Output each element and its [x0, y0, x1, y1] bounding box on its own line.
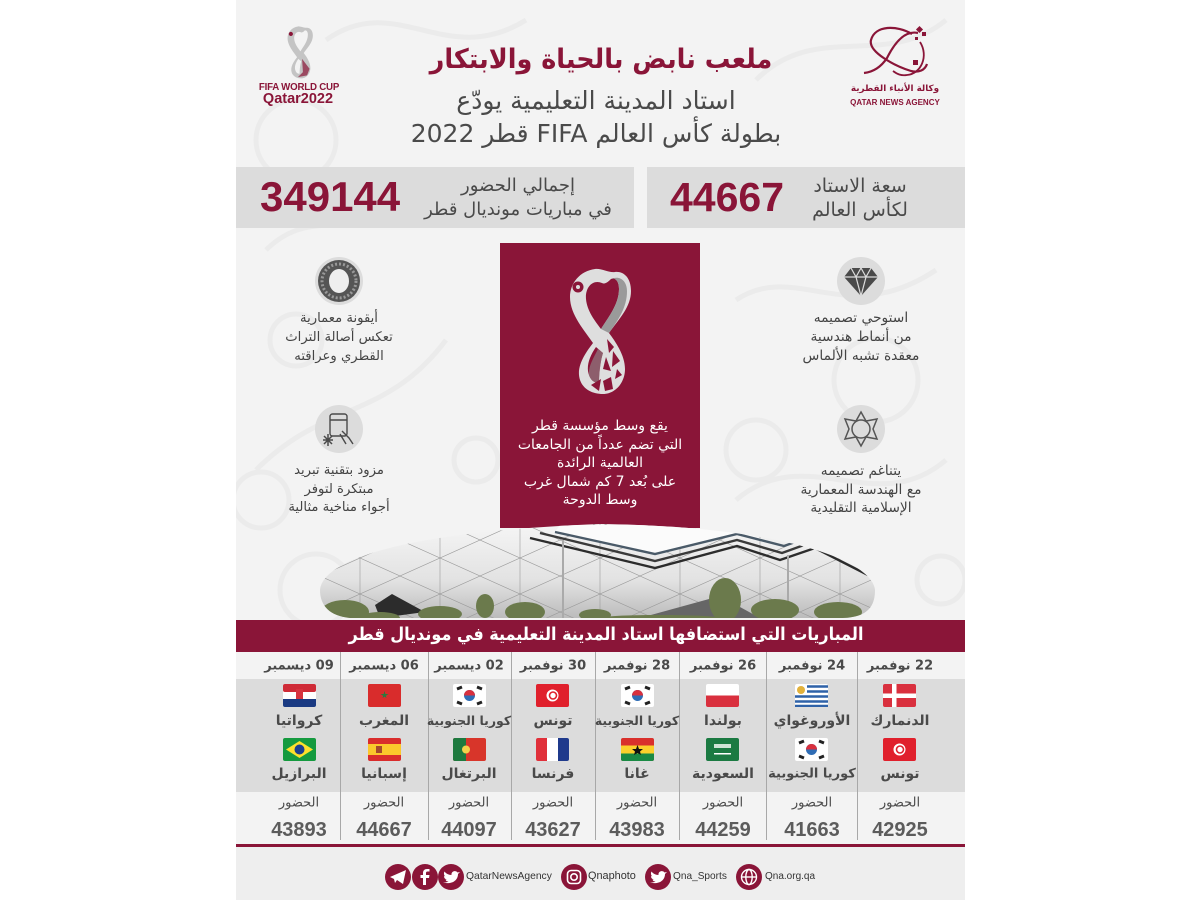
attendance: 42925 — [872, 819, 928, 841]
date: 24 نوفمبر — [779, 658, 845, 674]
text: مزود بتقنية تبريد — [294, 463, 384, 478]
footer: social links — [236, 847, 965, 900]
logo text: English name: QATAR NEWS AGENCY — [850, 98, 940, 107]
logo: FIFA World Cup Qatar 2022 — [259, 26, 339, 107]
flag: Denmark — [883, 684, 916, 707]
date: 26 نوفمبر — [690, 658, 756, 674]
column separators — [340, 652, 858, 840]
stat label: إجمالي الحضور — [461, 175, 575, 196]
text: location description: يقع وسط مؤسسة قطر — [532, 418, 668, 434]
text: أيقونة معمارية — [300, 311, 378, 326]
team: فرنسا — [532, 766, 574, 782]
flag: Morocco — [368, 684, 401, 707]
label: الحضور — [703, 796, 743, 810]
icon: telegram — [385, 864, 411, 890]
subtitle: استاد المدينة التعليمية يودّع — [456, 86, 736, 115]
flag: Tunisia — [536, 684, 569, 707]
attendance: 41663 — [784, 819, 840, 841]
flag: Tunisia — [883, 738, 916, 761]
attendance: 44259 — [695, 819, 751, 841]
team: البرازيل — [271, 766, 327, 782]
label: الحضور — [792, 796, 832, 810]
icon: website — [736, 864, 762, 890]
label: الحضور — [880, 796, 920, 810]
logo text: Qatar2022: Qatar2022 — [263, 91, 333, 107]
label: الحضور — [279, 796, 319, 810]
handle: Qna_Sports — [673, 871, 727, 882]
handle: Qna.org.qa — [765, 871, 815, 882]
label: الحضور — [449, 796, 489, 810]
stat number: 349144 — [260, 173, 400, 220]
team: كرواتيا — [276, 713, 322, 729]
table: matches — [236, 652, 965, 841]
team: تونس — [533, 713, 573, 729]
text: معقدة تشبه الألماس — [803, 348, 919, 364]
attendance: 44097 — [441, 819, 497, 841]
flag: South Korea — [453, 684, 486, 707]
logo: Qatar News Agency — [850, 26, 940, 107]
flag: Croatia — [283, 684, 316, 707]
team: البرتغال — [441, 766, 497, 782]
stat panel: stadium capacity — [647, 167, 965, 228]
icon: Islamic star — [837, 405, 885, 453]
attendance: 43983 — [609, 819, 665, 841]
team: غانا — [624, 766, 650, 782]
table row band: flags — [236, 679, 965, 792]
flag: Portugal — [453, 738, 486, 761]
icon: twitter — [645, 864, 671, 890]
banner text: المباريات التي استضافها استاد المدينة التعليمية في مونديال قطر — [349, 625, 863, 645]
label: الحضور — [364, 796, 404, 810]
team: كوريا الجنوبية — [768, 766, 856, 782]
logo text: FIFA WORLD CUP: FIFA WORLD CUP — [259, 82, 339, 93]
team: كوريا الجنوبية — [595, 713, 679, 728]
handle: QatarNewsAgency — [466, 871, 552, 882]
flag: South Korea — [621, 684, 654, 707]
text: يتناغم تصميمه — [821, 463, 901, 479]
match column: 28 November — [595, 658, 680, 841]
feature: diamond inspiration — [803, 257, 919, 364]
icon: woven ring — [315, 257, 363, 305]
text: تعكس أصالة التراث — [285, 330, 393, 345]
text — [288, 463, 390, 515]
team: الدنمارك — [871, 713, 929, 729]
text: location description: التي تضم عدداً من الجامعات — [518, 436, 682, 452]
feature: heritage icon — [285, 257, 393, 364]
match column: 26 November — [689, 658, 756, 841]
text: location description: وسط الدوحة — [563, 492, 637, 508]
label: الحضور — [533, 796, 573, 810]
stat panel: total attendance — [236, 167, 634, 228]
flag: Brazil — [283, 738, 316, 761]
team: تونس — [880, 766, 920, 782]
subtitle: بطولة كأس العالم FIFA قطر 2022 — [411, 119, 781, 148]
logo text: Arabic name: وكالة الأنباء القطرية — [851, 84, 939, 94]
match column: 30 November — [519, 658, 586, 841]
match column: 02 December — [427, 658, 512, 841]
team: إسبانيا — [361, 766, 407, 782]
date: 09 ديسمبر — [264, 658, 334, 674]
stat label: لكأس العالم — [812, 199, 908, 221]
icon: twitter — [438, 864, 464, 890]
banner: matches heading — [236, 620, 965, 652]
icon: facebook — [412, 864, 438, 890]
team: بولندا — [704, 713, 742, 729]
team: الأوروغواي — [774, 713, 850, 729]
icon: tournament emblem — [570, 268, 631, 394]
icon: instagram — [561, 864, 587, 890]
handle: Qnaphoto — [588, 870, 636, 882]
text: location description — [518, 418, 682, 508]
label: الحضور — [617, 796, 657, 810]
text — [285, 309, 393, 364]
feature: Islamic architecture — [800, 405, 922, 516]
date: 02 ديسمبر — [434, 658, 504, 674]
text: مبتكرة لتوفر — [304, 482, 374, 496]
team: كوريا الجنوبية — [427, 713, 511, 728]
text: أجواء مناخية مثالية — [288, 500, 390, 515]
text: مع الهندسة المعمارية — [800, 482, 922, 498]
attendance: 43893 — [271, 819, 327, 841]
flag: Poland — [706, 684, 739, 707]
date: 22 نوفمبر — [867, 658, 933, 674]
stat label: سعة الاستاد — [813, 175, 907, 197]
text: location description: على بُعد 7 كم شمال غرب — [524, 474, 676, 490]
text — [803, 310, 919, 364]
text — [800, 463, 922, 516]
match column: 06 December — [348, 658, 419, 841]
footer rule — [236, 844, 965, 847]
flag: Saudi Arabia — [706, 738, 739, 761]
panel: location — [500, 243, 700, 528]
team: المغرب — [359, 713, 409, 729]
match column: 22 November — [857, 652, 965, 841]
icon: phone and snowflake — [315, 405, 363, 453]
date: 30 نوفمبر — [520, 658, 586, 674]
stat number: 44667 — [670, 174, 784, 220]
icon: diamond — [837, 257, 885, 305]
flag: Ghana — [621, 738, 654, 761]
date: 28 نوفمبر — [604, 658, 670, 674]
team: السعودية — [692, 766, 754, 782]
text: القطري وعراقته — [294, 349, 384, 364]
match column: 09 December — [264, 658, 334, 841]
panel: page background — [236, 0, 965, 900]
illustration: stadium — [320, 524, 875, 618]
stat label: في مباريات مونديال قطر — [424, 199, 612, 220]
match column: 24 November — [768, 658, 856, 841]
feature: cooling technology — [288, 405, 390, 515]
text: استوحي تصميمه — [814, 310, 908, 326]
text: الإسلامية التقليدية — [810, 500, 912, 516]
flag: Spain — [368, 738, 401, 761]
stat label — [812, 175, 908, 221]
flag: Uruguay — [795, 684, 828, 707]
date: 06 ديسمبر — [349, 658, 419, 674]
flag: France — [536, 738, 569, 761]
text: location description: العالمية الرائدة — [557, 455, 643, 471]
text: من أنماط هندسية — [810, 329, 912, 345]
attendance: 43627 — [525, 819, 581, 841]
subtitle — [411, 86, 781, 148]
attendance: 44667 — [356, 819, 412, 841]
flag: South Korea — [795, 738, 828, 761]
title: ملعب نابض بالحياة والابتكار — [430, 44, 772, 75]
stat label — [423, 175, 612, 220]
